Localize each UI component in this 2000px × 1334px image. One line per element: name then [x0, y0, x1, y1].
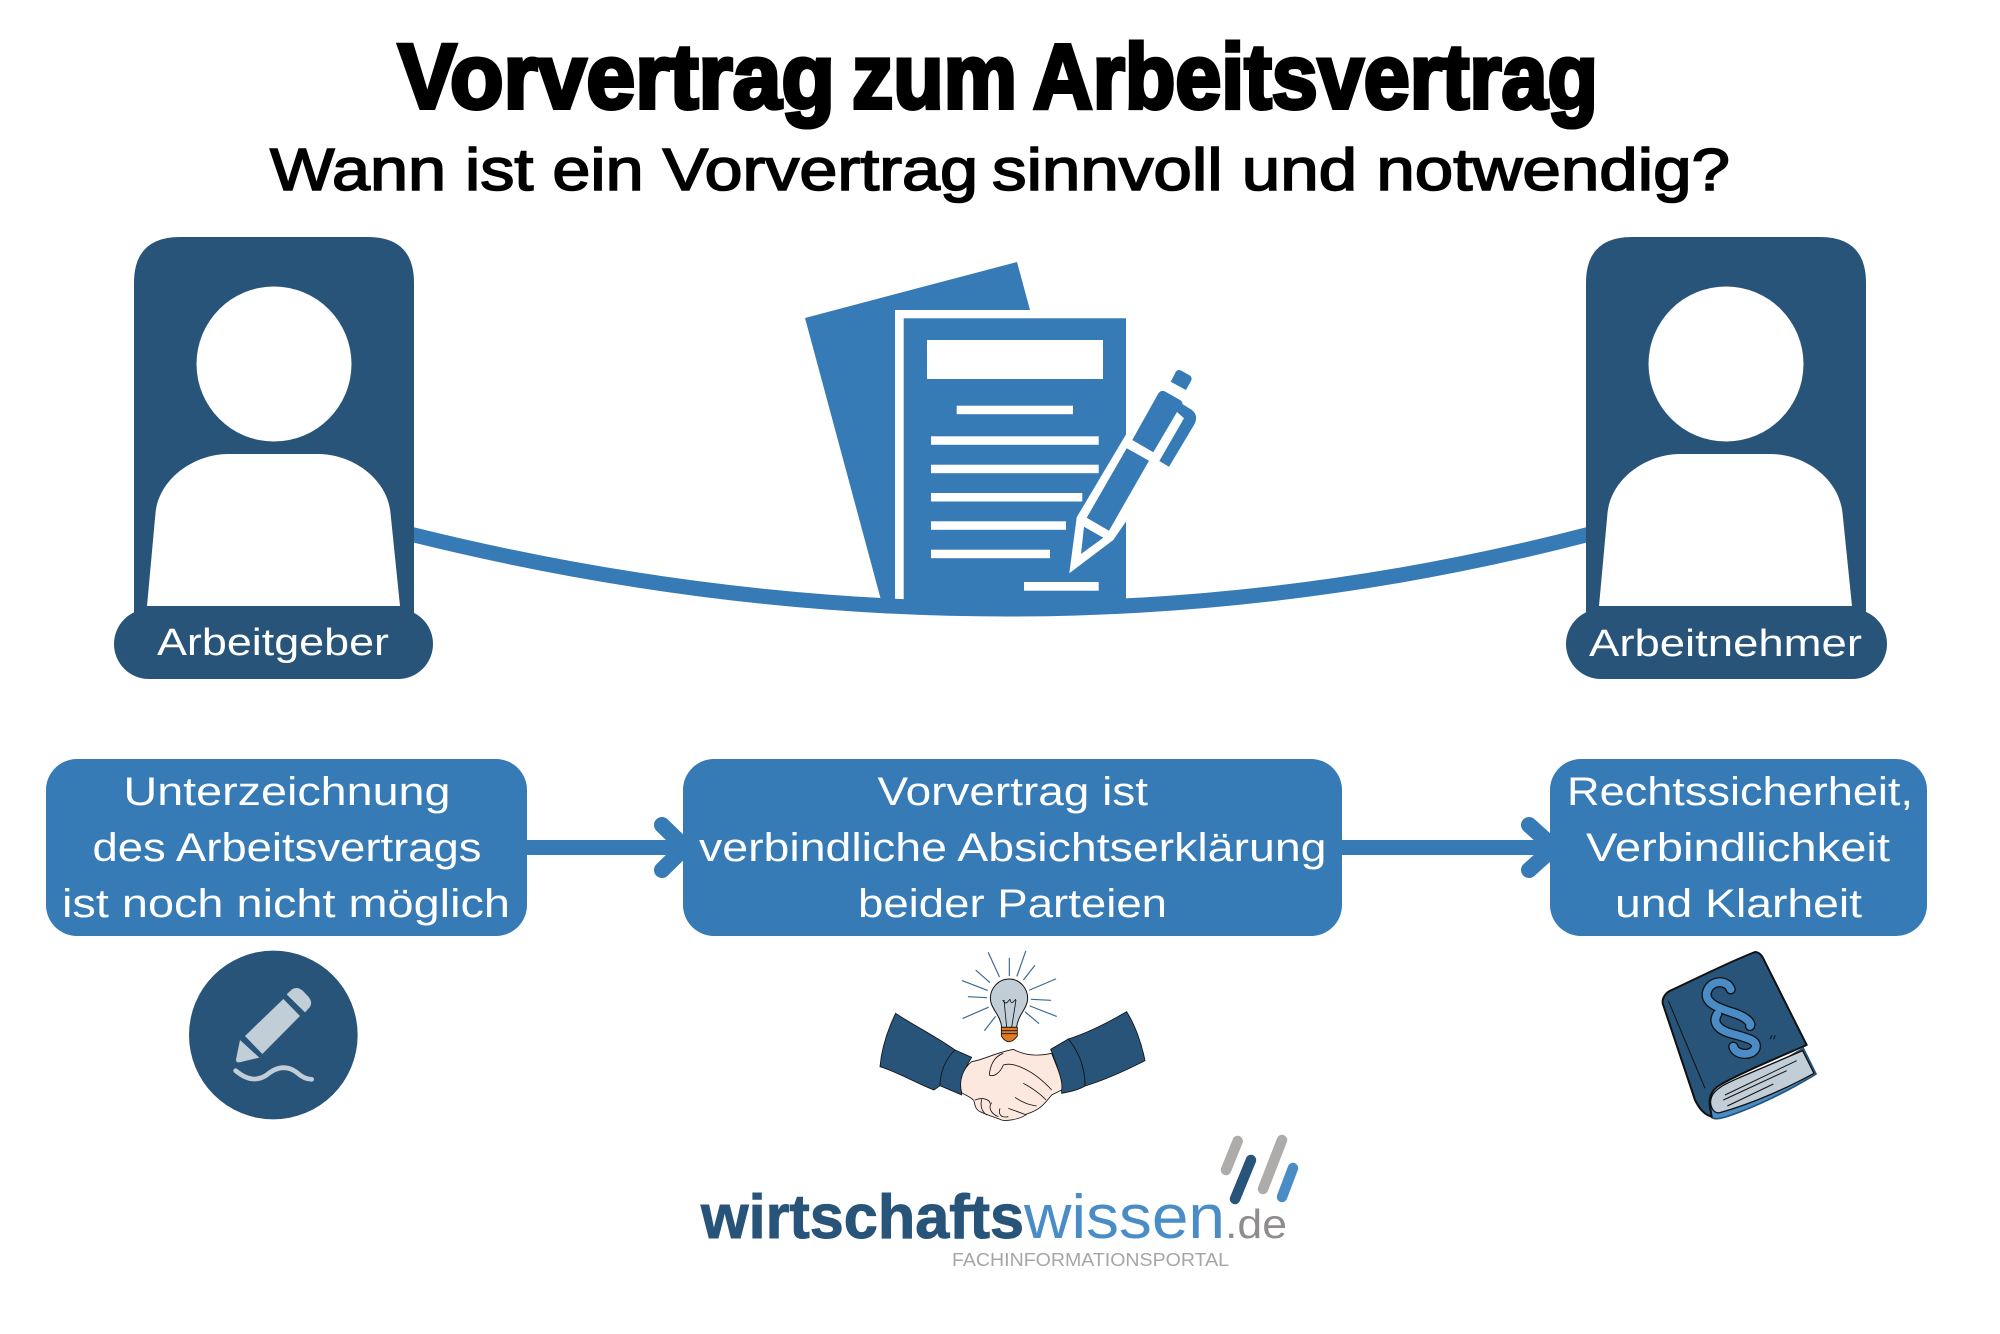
icon: law book with paragraph sign: [1663, 952, 1816, 1119]
panel: box 3: und Klarheit: [1615, 882, 1862, 926]
logo: wirtschaftswissen.de: wirtschafts: [700, 1183, 1024, 1252]
title: Arbeitsvertrag: [1033, 26, 1598, 128]
panel: box 2: verbindliche Absichtserklärung: [699, 826, 1326, 870]
title: zum: [852, 26, 1017, 128]
panel: box 1: [46, 759, 527, 936]
arrow: box 1 to box 2: [527, 825, 690, 870]
panel: box 1: des Arbeitsvertrags: [92, 826, 482, 870]
panel: box 3: [1550, 759, 1927, 936]
logo slashes: [1226, 1140, 1293, 1199]
arrow: box 2 to box 3: [1342, 825, 1556, 870]
panel: box 3: Verbindlichkeit: [1586, 826, 1890, 870]
icon: contract document with pen: [805, 262, 1196, 603]
panel: box 1: Unterzeichnung: [124, 770, 450, 814]
title: Vorvertrag: [398, 26, 835, 128]
panel: box 3: Rechtssicherheit,: [1567, 770, 1913, 814]
person card: Arbeitgeber: [114, 237, 433, 679]
subtitle: [270, 137, 1730, 203]
logo: wirtschaftswissen.de: wissen: [1023, 1183, 1225, 1252]
person card: Arbeitnehmer: [1566, 237, 1887, 679]
paragraph sign: [1707, 982, 1756, 1054]
subtitle: Wann ist ein Vorvertrag: [270, 137, 978, 203]
label: Arbeitgeber: Arbeitgeber: [157, 622, 389, 664]
panel: box 1: ist noch nicht möglich: [62, 882, 510, 926]
icon: handshake with light bulb: [880, 951, 1145, 1120]
connecting curve between parties: [410, 534, 1590, 609]
title: [398, 26, 1598, 128]
panel: box 2: Vorvertrag ist: [878, 770, 1148, 814]
icon: pencil in circle: [189, 951, 358, 1119]
panel: box 2: [683, 759, 1342, 936]
label: Arbeitnehmer: Arbeitnehmer: [1589, 623, 1862, 665]
logo: wirtschaftswissen.de: .de: [1225, 1201, 1287, 1247]
logo: wirtschaftswissen.de: FACHINFORMATIONSPORTAL: [952, 1250, 1229, 1270]
panel: box 2: beider Parteien: [858, 882, 1167, 926]
subtitle: sinnvoll und notwendig?: [992, 137, 1730, 203]
logo: wirtschaftswissen.de: [700, 1140, 1293, 1270]
